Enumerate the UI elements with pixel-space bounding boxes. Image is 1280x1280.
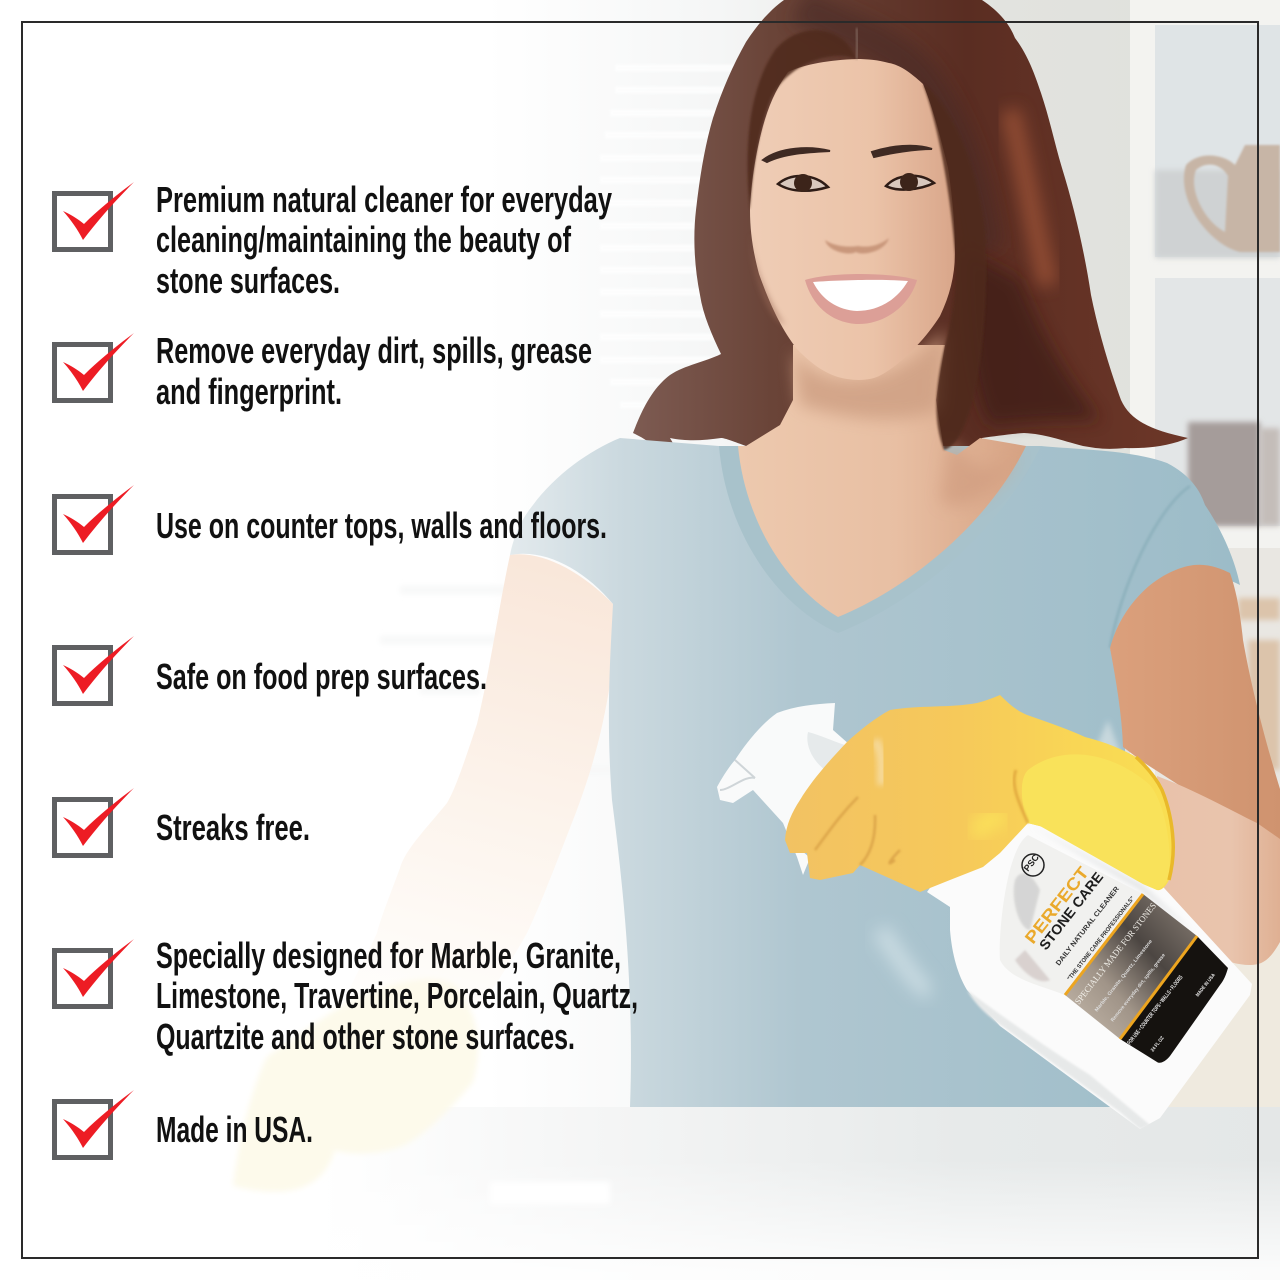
arm: right, forearm — [1157, 776, 1280, 965]
label text: FOR USE • COUNTER TOPS • WALLS • FLOORS — [1127, 975, 1185, 1046]
text block: Quartzite and other stone surfaces. — [156, 1016, 575, 1057]
item: stone types — [54, 935, 638, 1057]
checkbox icon — [54, 939, 134, 1006]
label text: STONE CARE — [1036, 869, 1106, 953]
item: counter tops — [54, 485, 607, 552]
label text: Remove everyday dirt, spills, grease — [1110, 952, 1167, 1023]
label text: Marble, Granite, Quartz, Limestone — [1094, 938, 1154, 1013]
text block: Made in USA. — [156, 1109, 313, 1150]
face — [750, 59, 955, 380]
text block: Specially designed for Marble, Granite, — [156, 935, 621, 976]
hair strands framing the face — [748, 30, 986, 450]
item: made in USA — [54, 1090, 313, 1158]
checkbox icon — [54, 788, 134, 856]
label text: DAILY NATURAL CLEANER — [1055, 886, 1121, 967]
text block — [156, 179, 612, 301]
label text — [1021, 852, 1217, 1053]
checkbox icon — [54, 182, 134, 250]
yellow rubber glove — [785, 695, 1173, 892]
checkbox icon — [54, 1090, 134, 1158]
text block: and fingerprint. — [156, 371, 342, 412]
text block: Safe on food prep surfaces. — [156, 656, 487, 697]
counter top — [0, 1107, 1280, 1280]
item: remove everyday dirt — [54, 330, 592, 412]
checkbox icon — [54, 636, 134, 704]
item: food prep — [54, 636, 487, 704]
text block: Premium natural cleaner for everyday — [156, 179, 612, 220]
checkbox icon — [54, 333, 134, 400]
arm: left, faded — [340, 554, 615, 1010]
nose — [825, 238, 889, 254]
checkbox icon — [54, 485, 134, 552]
kitchen shelves — [1130, 0, 1280, 1110]
eyes — [778, 173, 934, 192]
shirt — [510, 438, 1240, 1107]
text block — [156, 330, 592, 412]
hair: back — [633, 0, 1188, 500]
arm: right, upper — [1110, 565, 1280, 850]
item: premium natural cleaner — [54, 179, 612, 301]
label text: PERFECT — [1021, 863, 1093, 947]
label text: PSC — [1022, 852, 1041, 873]
text block — [156, 935, 638, 1057]
eyebrows — [763, 146, 932, 162]
smile — [805, 274, 917, 324]
sprayer head — [717, 703, 850, 875]
label text: 24 FL OZ — [1150, 1035, 1166, 1053]
text block: Use on counter tops, walls and floors. — [156, 505, 607, 546]
text block: Remove everyday dirt, spills, grease — [156, 330, 592, 371]
label: black panel — [1120, 936, 1228, 1063]
text block: cleaning/maintaining the beauty of — [156, 219, 572, 260]
text block: stone surfaces. — [156, 260, 340, 301]
chest and neck — [719, 330, 1041, 633]
label text: "THE STONE CARE PROFESSIONALS" — [1067, 896, 1136, 982]
label: upper — [1000, 835, 1143, 995]
label text: SPECIALLY MADE FOR STONES — [1073, 901, 1158, 1006]
text block: Streaks free. — [156, 807, 310, 848]
label: tan panel — [1065, 894, 1197, 1039]
item: streaks free — [54, 788, 310, 856]
faded glove on counter — [233, 979, 478, 1192]
bottle body — [927, 810, 1252, 1129]
text block: Limestone, Travertine, Porcelain, Quartz, — [156, 975, 638, 1016]
spray bottle — [717, 703, 1252, 1129]
label text: MADE IN USA — [1195, 972, 1217, 998]
